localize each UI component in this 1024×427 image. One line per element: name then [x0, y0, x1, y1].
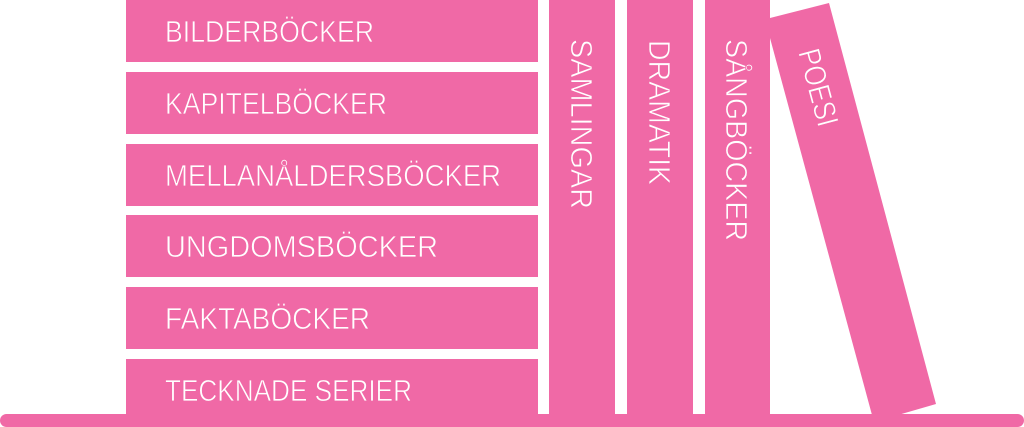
book: Sångböcker: SÅNGBÖCKER: [719, 39, 754, 241]
book: Bilderböcker: BILDERBÖCKER: [165, 14, 374, 49]
book: Samlingar: [549, 0, 615, 415]
book: Mellanåldersböcker: MELLANÅLDERSBÖCKER: [165, 158, 501, 193]
book: Mellanåldersböcker: [126, 144, 538, 206]
book: Bilderböcker: [126, 0, 538, 62]
book: Poesi (leaning): [770, 3, 936, 415]
book: Dramatik: DRAMATIK: [642, 40, 677, 185]
book: Faktaböcker: [126, 287, 538, 349]
book: Poesi (leaning): POESI: [791, 45, 845, 130]
book: Kapitelböcker: [126, 72, 538, 134]
shelf: [0, 414, 1024, 427]
book: Tecknade serier: [126, 359, 538, 415]
book: Tecknade serier: TECKNADE SERIER: [165, 373, 412, 408]
book: Kapitelböcker: KAPITELBÖCKER: [165, 86, 387, 121]
book: Ungdomsböcker: [126, 215, 538, 277]
book: Dramatik: [627, 0, 693, 415]
book: Ungdomsböcker: UNGDOMSBÖCKER: [165, 229, 438, 264]
book: Sångböcker: [705, 0, 770, 415]
book: Faktaböcker: FAKTABÖCKER: [165, 301, 370, 336]
book: Samlingar: SAMLINGAR: [564, 39, 599, 209]
